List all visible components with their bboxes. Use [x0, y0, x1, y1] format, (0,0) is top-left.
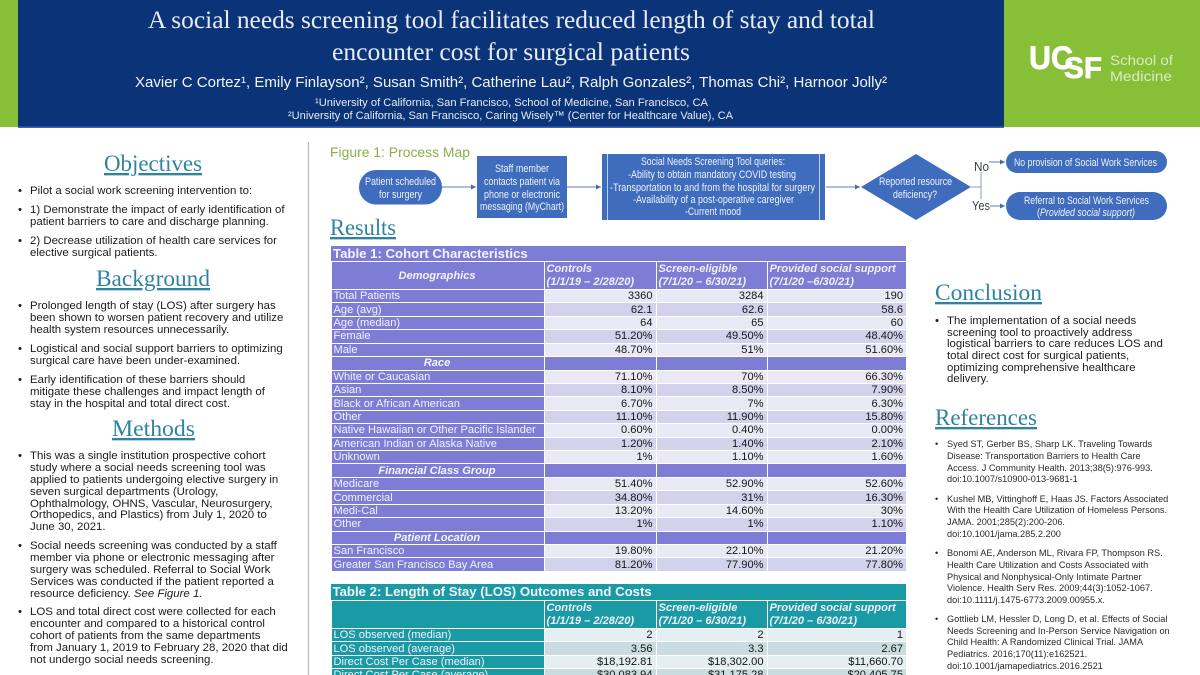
methods list: •	[18, 450, 22, 462]
table 1: cohort characteristics: 1%	[636, 518, 652, 530]
outcome: no provision	[1006, 151, 1167, 173]
references list: •	[935, 439, 938, 449]
conclusion text: optimizing comprehensive healthcare	[947, 362, 1136, 374]
step: staff member contacts	[477, 156, 567, 218]
title: encounter cost for surgical patients	[332, 37, 690, 66]
background list: health system resources unnecessarily.	[30, 324, 229, 336]
methods list: from January 1, 2019 to February 28, 2020 that did	[30, 642, 288, 654]
methods list: seven surgical departments (Urology,	[30, 486, 218, 498]
references list: doi:10.1111/j.1475-6773.2009.00955.x.	[947, 595, 1105, 605]
table 2 title: Table 2: Length of Stay (LOS) Outcomes and Costs	[332, 584, 652, 599]
references list: Child Health: A Randomized Clinical Trial. JAMA	[947, 637, 1144, 647]
decision diamond: Reported resource	[879, 176, 952, 188]
step: patient scheduled: for surgery	[379, 189, 422, 201]
methods list: applied to patients undergoing elective surgery in	[30, 474, 278, 486]
methods list: cohort of patients from the same departments	[30, 630, 261, 642]
references list: doi:10.1001/jama.285.2.200	[947, 529, 1061, 539]
table 1: cohort characteristics: 65	[751, 317, 764, 329]
authors: Xavier C Cortez¹, Emily Finlayson², Susan Smith², Catherine Lau², Ralph Gonzales², Thomas Chi², Harnoor Jolly²	[135, 74, 887, 91]
heading: Background: Background	[96, 266, 210, 292]
table 1: cohort characteristics: 48.70%	[615, 344, 652, 356]
logo: UCSF School of Medicine: Medicine	[1110, 68, 1172, 84]
table 1: cohort characteristics: 62.6	[742, 304, 764, 316]
heading: Objectives: Objectives	[104, 151, 202, 177]
references list: Kushel MB, Vittinghoff E, Haas JS. Factors Associated	[947, 494, 1168, 504]
conclusion text: logistical barriers to care reduces LOS and	[947, 338, 1163, 350]
references list: •	[935, 614, 938, 624]
references list: doi:10.1007/s10900-013-9681-1	[947, 474, 1078, 484]
background list	[18, 300, 283, 410]
arrow: yes	[990, 205, 1005, 207]
table 1: cohort characteristics: 1.60%	[872, 451, 903, 463]
header banner	[0, 0, 1200, 128]
table 1: cohort characteristics: Male	[334, 344, 358, 356]
methods list: •	[18, 540, 22, 552]
table 2: LOS outcomes and costs: (7/1/20 – 6/30/21)	[658, 615, 746, 627]
label: Yes: Yes	[972, 198, 990, 213]
table 2: LOS outcomes and costs: $11,660.70	[848, 656, 903, 668]
step: staff member contacts: Staff member	[495, 163, 549, 175]
affiliations: ¹University of California, San Francisco, School of Medicine, San Francisco, CA	[315, 97, 709, 109]
references list: Syed ST, Gerber BS, Sharp LK. Traveling Towards	[947, 439, 1153, 449]
methods list: LOS and total direct cost were collected for each	[30, 606, 276, 618]
table 1: cohort characteristics: 51.20%	[615, 330, 652, 342]
background list: Early identification of these barriers should	[30, 374, 245, 386]
heading: References: References	[935, 405, 1037, 431]
table 1: cohort characteristics: 30%	[881, 505, 903, 517]
objectives list: •	[18, 185, 22, 197]
table 1: cohort characteristics: Demographics	[398, 270, 476, 282]
branch connector	[971, 172, 981, 199]
table 1: cohort characteristics: Financial Class Group	[378, 465, 496, 477]
references list: Disease: Transportation Barriers to Health Care	[947, 451, 1141, 461]
conclusion text: screening tool to proactively address	[947, 327, 1133, 339]
arrow	[567, 186, 601, 188]
table 1: cohort characteristics: 51.60%	[865, 344, 903, 356]
table 2: LOS outcomes and costs	[332, 601, 906, 675]
table 1: cohort characteristics: 77.90%	[726, 559, 764, 571]
table 1: cohort characteristics: 2.10%	[872, 438, 903, 450]
table 1: cohort characteristics: 60	[891, 317, 903, 329]
table 1: cohort characteristics: Controls	[546, 263, 592, 275]
objectives list: •	[18, 235, 22, 247]
step: staff member contacts: phone or electronic	[484, 189, 560, 201]
objectives list: 1) Demonstrate the impact of early identification of	[30, 204, 285, 216]
background list: been shown to worsen patient recovery and utilize	[30, 312, 283, 324]
table 1 title	[331, 246, 906, 262]
conclusion text: The implementation of a social needs	[947, 315, 1136, 327]
table 1: cohort characteristics: 8.50%	[732, 384, 764, 396]
table 1: cohort characteristics: 16.30%	[865, 492, 903, 504]
table 1 title: Table 1: Cohort Characteristics	[333, 246, 528, 261]
table 1: cohort characteristics: 70%	[741, 371, 764, 383]
table 1: cohort characteristics: 7.90%	[872, 384, 903, 396]
table 2: LOS outcomes and costs: 2	[757, 629, 764, 641]
table 1: cohort characteristics: 51.40%	[615, 478, 652, 490]
table 1: cohort characteristics: 3360	[628, 290, 652, 302]
table 1: cohort characteristics: American Indian or Alaska Native	[334, 438, 497, 450]
objectives list: elective surgical patients.	[30, 247, 158, 259]
table 1: cohort characteristics: 21.20%	[865, 545, 903, 557]
table 1: cohort characteristics: 1.10%	[732, 451, 764, 463]
table 1: cohort characteristics: Patient Location	[394, 532, 480, 544]
table 1: cohort characteristics: 22.10%	[726, 545, 764, 557]
step: staff member contacts: contacts patient via	[484, 176, 561, 188]
methods list: Orthopedics, and Plastics) from July 1, 2020 to	[30, 509, 267, 521]
table 1: cohort characteristics: Race	[424, 357, 450, 369]
table 1: cohort characteristics: 14.60%	[726, 505, 764, 517]
logo: UCSF School of Medicine: SF	[1064, 52, 1102, 85]
table 1: cohort characteristics: Black or African American	[334, 398, 460, 410]
table 2: LOS outcomes and costs: Controls	[546, 602, 592, 614]
table 1: cohort characteristics: 52.60%	[865, 478, 903, 490]
background list: •	[18, 343, 22, 355]
affiliations: ²University of California, San Francisco, Caring Wisely™ (Center for Healthcare Value), CA	[288, 110, 734, 122]
table 1: cohort characteristics: 3284	[739, 290, 764, 302]
references list: Access. J Community Health. 2013;38(5):976-993.	[947, 463, 1153, 473]
table 1: cohort characteristics: Greater San Francisco Bay Area	[334, 559, 493, 571]
table 2: LOS outcomes and costs: 2.67	[881, 643, 903, 655]
table 2: LOS outcomes and costs: 2	[646, 629, 652, 641]
table 1: cohort characteristics: Other	[334, 518, 361, 530]
objectives list	[18, 185, 285, 259]
table 1: cohort characteristics: 77.80%	[865, 559, 903, 571]
table 2: LOS outcomes and costs: 3.56	[631, 643, 652, 655]
references list: Gottlieb LM, Hessler D, Long D, et al. Effects of Social	[947, 614, 1167, 624]
table 1: cohort characteristics: 58.6	[881, 304, 903, 316]
step: screening tool queries: -Availability of a post-operative caregiver	[633, 194, 794, 206]
figure title: Figure 1: Process Map	[330, 145, 470, 160]
table 1: cohort characteristics	[331, 261, 906, 571]
logo: UCSF School of Medicine	[1029, 40, 1173, 85]
table 2: LOS outcomes and costs: 3.3	[748, 643, 764, 655]
table 1: cohort characteristics: Screen-eligible	[658, 263, 737, 275]
table 1: cohort characteristics: Native Hawaiian or Other Pacific Islander	[334, 424, 536, 436]
table 2: LOS outcomes and costs: LOS observed (average)	[334, 643, 455, 655]
table 1: cohort characteristics: Commercial	[334, 492, 393, 504]
table 1: cohort characteristics: (1/1/19 – 2/28/20)	[546, 276, 634, 288]
table 1: cohort characteristics: 0.00%	[872, 424, 903, 436]
logo: UCSF School of Medicine: School of	[1110, 52, 1173, 68]
column divider	[308, 142, 310, 675]
table 1: cohort characteristics: Other	[334, 411, 361, 423]
decision diamond: deficiency?	[893, 189, 937, 201]
methods list: June 30, 2021.	[30, 521, 106, 533]
table 1: cohort characteristics: (7/1/20 – 6/30/21)	[658, 276, 746, 288]
conclusion text: •	[935, 315, 939, 327]
conclusion text	[935, 315, 1163, 385]
objectives list: Pilot a social work screening intervention to:	[30, 185, 252, 197]
table 1: cohort characteristics: 6.70%	[621, 398, 652, 410]
table 1: cohort characteristics: 34.80%	[615, 492, 652, 504]
methods list	[18, 450, 288, 666]
references list: •	[935, 494, 938, 504]
outcome: referral: (Provided social support)	[1037, 207, 1135, 219]
table 1: cohort characteristics: 71.10%	[615, 371, 652, 383]
table 1: cohort characteristics: Provided social support	[770, 263, 896, 275]
conclusion text: total direct cost for surgical patients,	[947, 350, 1129, 362]
table 1: cohort characteristics: 66.30%	[865, 371, 903, 383]
process map flowchart	[359, 151, 1167, 220]
methods list: study where a social needs screening tool was	[30, 462, 266, 474]
table 2: LOS outcomes and costs: Provided social support	[770, 602, 896, 614]
methods list: member via phone or electronic messaging after	[30, 552, 275, 564]
table 1: cohort characteristics: 7%	[747, 398, 764, 410]
step: screening tool queries: -Current mood	[685, 206, 741, 218]
references list: Health Care Utilization and Costs Associated with	[947, 560, 1148, 570]
title: A social needs screening tool facilitates reduced length of stay and total	[148, 5, 875, 34]
methods list: This was a single institution prospective cohort	[30, 450, 266, 462]
methods list: not undergo social needs screening.	[30, 654, 214, 666]
table 1: cohort characteristics: 8.10%	[621, 384, 652, 396]
table 1: cohort characteristics: 6.30%	[872, 398, 903, 410]
table 1: cohort characteristics: 31%	[741, 492, 764, 504]
outcome: referral: Referral to Social Work Services	[1024, 195, 1149, 207]
objectives list: •	[18, 204, 22, 216]
table 2: LOS outcomes and costs: (7/1/20 – 6/30/21)	[770, 615, 857, 627]
references list: Violence. Health Serv Res. 2009;44(3):1052-1067.	[947, 583, 1153, 593]
table 1: cohort characteristics: 1%	[636, 451, 652, 463]
table 1: cohort characteristics: 13.20%	[615, 505, 652, 517]
table 1: cohort characteristics: 1.10%	[872, 518, 903, 530]
table 1: cohort characteristics: Age (median)	[334, 317, 400, 329]
references list: •	[935, 548, 938, 558]
table 1: cohort characteristics: 1%	[747, 518, 764, 530]
table 1: cohort characteristics: White or Caucasian	[334, 371, 430, 383]
methods list: surgery was scheduled. Referral to Social Work	[30, 564, 271, 576]
heading: Methods: Methods	[112, 416, 195, 442]
methods list: •	[18, 606, 22, 618]
references list: Needs Screening and In-Person Service Navigation on	[947, 626, 1170, 636]
background list: Prolonged length of stay (LOS) after surgery has	[30, 300, 276, 312]
table 1: cohort characteristics: 1.40%	[732, 438, 764, 450]
table 1: cohort characteristics: Medi-Cal	[334, 505, 378, 517]
table 1: cohort characteristics: 49.50%	[726, 330, 764, 342]
table 1: cohort characteristics: (7/1/20 –6/30/21)	[770, 276, 854, 288]
methods list: encounter and compared to a historical control	[30, 618, 265, 630]
table 1: cohort characteristics: Unknown	[334, 451, 380, 463]
heading: Conclusion: Conclusion	[935, 280, 1042, 306]
table 1: cohort characteristics: 81.20%	[615, 559, 652, 571]
references list: With the Health Care Utilization of Homeless Persons.	[947, 505, 1167, 515]
references list: JAMA. 2001;285(2):200-206.	[947, 517, 1065, 527]
table 2 title	[330, 584, 906, 600]
step: screening tool queries: Social Needs Screening Tool queries:	[641, 156, 785, 168]
table 2: LOS outcomes and costs: $18,192.81	[597, 656, 652, 668]
table 1: cohort characteristics: 64	[640, 317, 652, 329]
objectives list: patient barriers to care and discharge planning.	[30, 216, 269, 228]
step: screening tool queries: -Transportation to and from the hospital for surgery	[610, 182, 815, 194]
arrow	[826, 186, 860, 188]
background list: •	[18, 374, 22, 386]
decision diamond	[861, 154, 971, 220]
methods list: Ophthalmology, OHNS, Vascular, Neurosurgery,	[30, 498, 272, 510]
references list: Physical and Nonphysical-Only Intimate Partner	[947, 572, 1142, 582]
table 2: LOS outcomes and costs: Screen-eligible	[658, 602, 737, 614]
methods list: Services was conducted if the patient reported a	[30, 576, 274, 588]
background list: surgical care have been under-examined.	[30, 355, 240, 367]
references list: Pediatrics. 2016;170(11):e162521.	[947, 649, 1087, 659]
step: screening tool queries: -Ability to obtain mandatory COVID testing	[628, 169, 796, 181]
objectives list: 2) Decrease utilization of health care services for	[30, 235, 277, 247]
logo: UCSF School of Medicine: UC	[1029, 40, 1073, 76]
table 2: LOS outcomes and costs: $18,302.00	[708, 656, 764, 668]
table 2: LOS outcomes and costs: (1/1/19 – 2/28/20)	[546, 615, 634, 627]
table 1: cohort characteristics: 15.80%	[865, 411, 903, 423]
table 1: cohort characteristics: 11.10%	[616, 411, 652, 423]
arrow	[442, 186, 476, 188]
table 1: cohort characteristics: Asian	[334, 384, 361, 396]
table 1: cohort characteristics: San Francisco	[334, 545, 404, 557]
table 2: LOS outcomes and costs: Direct Cost Per Case (median)	[334, 656, 485, 668]
table 1: cohort characteristics: 19.80%	[615, 545, 652, 557]
table 1: cohort characteristics: Female	[334, 330, 370, 342]
table 1: cohort characteristics: 0.40%	[732, 424, 764, 436]
background list: Logistical and social support barriers to optimizing	[30, 343, 283, 355]
step: patient scheduled: Patient scheduled	[365, 176, 436, 188]
table 1: cohort characteristics: 52.90%	[726, 478, 764, 490]
table 1: cohort characteristics: 48.40%	[865, 330, 903, 342]
references list	[935, 439, 1170, 671]
table 1: cohort characteristics: 11.90%	[727, 411, 764, 423]
methods list: Social needs screening was conducted by a staff	[30, 540, 278, 552]
outcome: referral	[1006, 192, 1167, 220]
title	[148, 5, 875, 66]
methods list: resource deficiency. See Figure 1.	[30, 588, 202, 600]
arrow: no	[989, 161, 1005, 163]
references list: doi:10.1001/jamapediatrics.2016.2521	[947, 661, 1103, 671]
background list: stay in the hospital and total direct cost.	[30, 398, 230, 410]
table 1: cohort characteristics: 51%	[741, 344, 764, 356]
step: staff member contacts: messaging (MyChart)	[480, 201, 564, 213]
outcome: no provision: No provision of Social Work Services	[1014, 157, 1157, 169]
conclusion text: delivery.	[947, 373, 989, 385]
table 1: cohort characteristics: Total Patients	[334, 290, 400, 302]
table 1: cohort characteristics: 62.1	[631, 304, 652, 316]
table 2: LOS outcomes and costs: 1	[897, 629, 903, 641]
affiliations	[288, 97, 734, 122]
table 2: LOS outcomes and costs: LOS observed (median)	[334, 629, 451, 641]
table 1: cohort characteristics: 190	[884, 290, 903, 302]
background list: mitigate these challenges and impact length of	[30, 386, 266, 398]
label: No: No	[974, 159, 989, 174]
background list: •	[18, 300, 22, 312]
table 1: cohort characteristics: Medicare	[334, 478, 379, 490]
table 1: cohort characteristics: 0.60%	[621, 424, 652, 436]
references list: Bonomi AE, Anderson ML, Rivara FP, Thompson RS.	[947, 548, 1163, 558]
table 1: cohort characteristics: 1.20%	[621, 438, 652, 450]
table 1: cohort characteristics: Age (avg)	[334, 304, 382, 316]
step: screening tool queries	[602, 154, 825, 220]
heading: Results: Results	[330, 215, 396, 241]
step: patient scheduled	[359, 170, 442, 204]
